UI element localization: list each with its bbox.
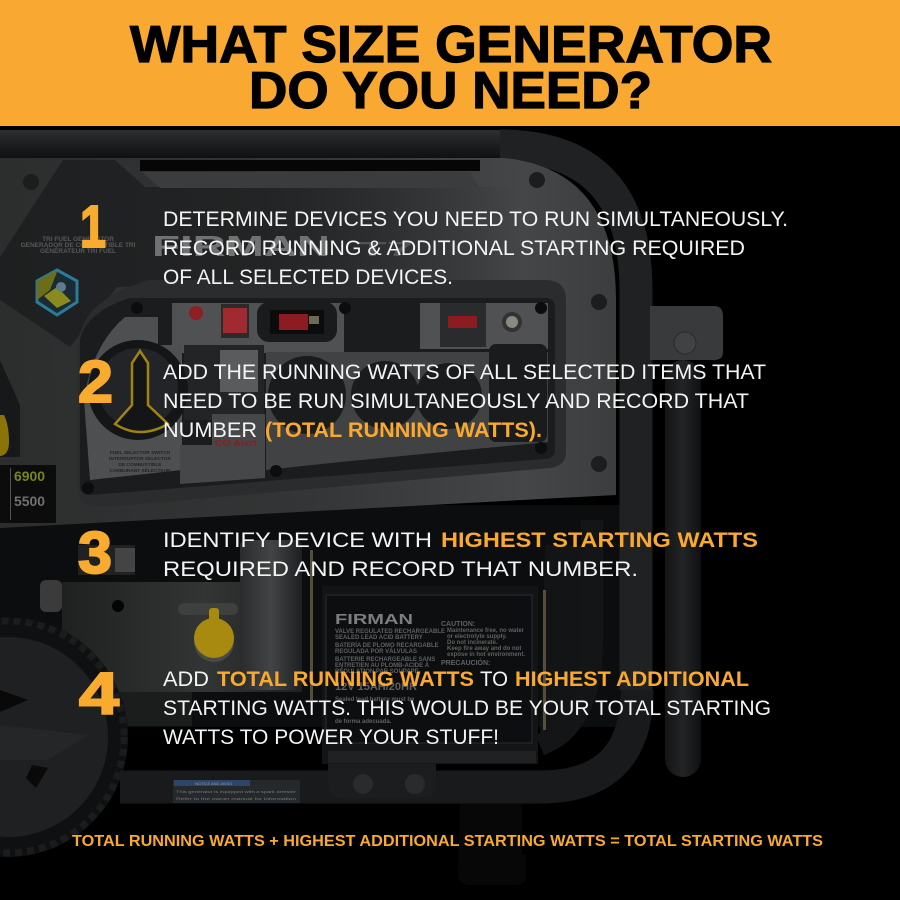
battery label text: VALVE REGULATED RECHARGEABLE [335,629,445,635]
fuel type label: TRI FUEL GENERATOR [42,236,114,243]
battery label text: CAUTION: [441,621,475,628]
wattage badge: 6900 [14,468,45,484]
model number: T7 [358,239,413,261]
battery label text: SEALED LEAD ACID BATTERY [335,635,423,641]
fuel selector knob [88,340,188,440]
jack [504,314,520,330]
rear frame tube [665,360,701,777]
generator photo [0,130,723,885]
number 3: 3 [78,520,112,586]
battery label text: 12V 15AH/20HR [335,681,417,693]
battery label text: BATTERIE RECHARGEABLE SANS [335,657,435,663]
brand logo: FIRMAN [152,231,330,263]
right switch [440,303,486,347]
warning label: This generator is equipped with a spark arrester [176,789,297,794]
step 3 [78,520,758,586]
step 1 [80,194,788,289]
title: WHAT SIZE GENERATOR [130,15,772,73]
step 3 text [163,528,758,581]
panel screws [3,172,607,472]
left yellow tank marker [0,415,9,456]
engine bay [0,505,620,740]
battery label text: BATERÍA DE PLOMO RECARGABLE [335,641,439,649]
title [130,15,772,119]
step 1 text: RECORD RUNNING & ADDITIONAL STARTING REQUIRED [163,236,745,260]
battery label text: Sealed lead battery must be [335,697,415,703]
wattage badge [0,465,56,523]
top switch plate [172,303,344,353]
battery label text: ENTRETIEN AU PLOMB-ACIDE À [335,662,430,669]
battery bracket [328,764,436,798]
control panel recess [78,280,566,507]
upper panel strip [142,172,480,188]
warning label [173,780,300,803]
battery label text: Do not incinerate. [447,640,498,646]
CO alert: CO Alert [215,438,257,448]
front panel [0,158,616,528]
selector plate [84,317,182,480]
step 3 text: HIGHEST STARTING WATTS [441,528,758,552]
step 1 text: OF ALL SELECTED DEVICES. [163,265,453,289]
warning label: Refer to the owner manual for information [176,796,296,801]
lower frame tube [120,690,637,787]
fuse switch [220,350,258,392]
step 4 text: TOTAL RUNNING WATTS [217,667,474,691]
inner frame tube [540,520,592,745]
yellow fuel cap [194,608,234,662]
step 4 text [163,667,771,749]
dark hex section [0,160,520,347]
step 4 text: WATTS TO POWER YOUR STUFF! [163,725,499,749]
step 2 text [163,360,766,442]
step 2 text: NUMBER [163,418,257,442]
step 4 text: HIGHEST ADDITIONAL [515,667,749,691]
step 4 text: ADD [163,667,209,691]
wattage badge: 5500 [14,493,45,509]
power light [189,306,203,320]
battery label text: or electrolyte supply. [447,634,507,640]
selector caption: INTERRUPTOR SELECTOR [109,456,171,462]
battery label text: expose in hot environment. [447,652,525,658]
number 2: 2 [78,349,113,415]
battery label text: Keep fire away and do not [447,646,521,652]
header banner [0,0,900,126]
step 4 [79,661,771,749]
wheel [0,617,128,857]
left fuel gauge recess [0,360,20,457]
selector caption: CARBURANT SÉLECTEUR [109,466,171,474]
main frame tube [0,130,636,690]
red switch [221,304,249,338]
selector caption [109,450,171,474]
step 2 [78,349,766,442]
formula footer: TOTAL RUNNING WATTS + HIGHEST ADDITIONAL STARTING WATTS = TOTAL STARTING WATTS [72,833,823,850]
side bracket [650,306,723,360]
fuel type label: GENERADOR DE COMBUSTIBLE TRI [21,242,136,249]
title: DO YOU NEED? [249,61,652,119]
battery label text: Maintenance free, no water [447,628,525,634]
fuel type label: GÉNÉRATEUR TRI FUEL [40,246,116,255]
step 2 text: ADD THE RUNNING WATTS OF ALL SELECTED ITEMS THAT [163,360,766,384]
fuel type label [21,236,136,255]
step 1 text: DETERMINE DEVICES YOU NEED TO RUN SIMULTANEOUSLY. [163,207,788,231]
number 4: 4 [79,661,119,727]
plate screws [82,302,547,494]
step 3 text: REQUIRED AND RECORD THAT NUMBER. [163,557,638,581]
tri fuel icon [37,270,77,315]
generator foot [458,800,526,885]
outlets [268,344,547,442]
battery label text: de forma adecuada. [335,719,392,725]
battery brand: FIRMAN [335,611,413,628]
outlet plate [266,352,548,470]
warning label: NOTICE AND AVISO [195,781,232,786]
battery [310,550,546,764]
step 4 text: STARTING WATTS. THIS WOULD BE YOUR TOTAL STARTING [163,696,771,720]
number 1: 1 [80,194,106,260]
step 4 text: TO [480,667,508,691]
battery label text: PRECAUCIÓN: [441,658,490,667]
step 2 text: (TOTAL RUNNING WATTS). [265,418,542,442]
battery label text: REGULADA POR VÁLVULAS [335,648,417,655]
CO alert plate [180,414,265,484]
step 3 text: IDENTIFY DEVICE WITH [163,528,432,552]
selector caption: FUEL SELECTOR SWITCH [110,450,171,456]
digital display [257,302,337,342]
step 2 text: NEED TO BE RUN SIMULTANEOUSLY AND RECORD THAT [163,389,749,413]
selector caption: DE COMBUSTIBLE [118,462,162,468]
step 1 text [163,207,788,289]
battery label text: RÉGULATION PAR SOUPAPE [335,667,419,675]
battery label text [335,621,525,725]
